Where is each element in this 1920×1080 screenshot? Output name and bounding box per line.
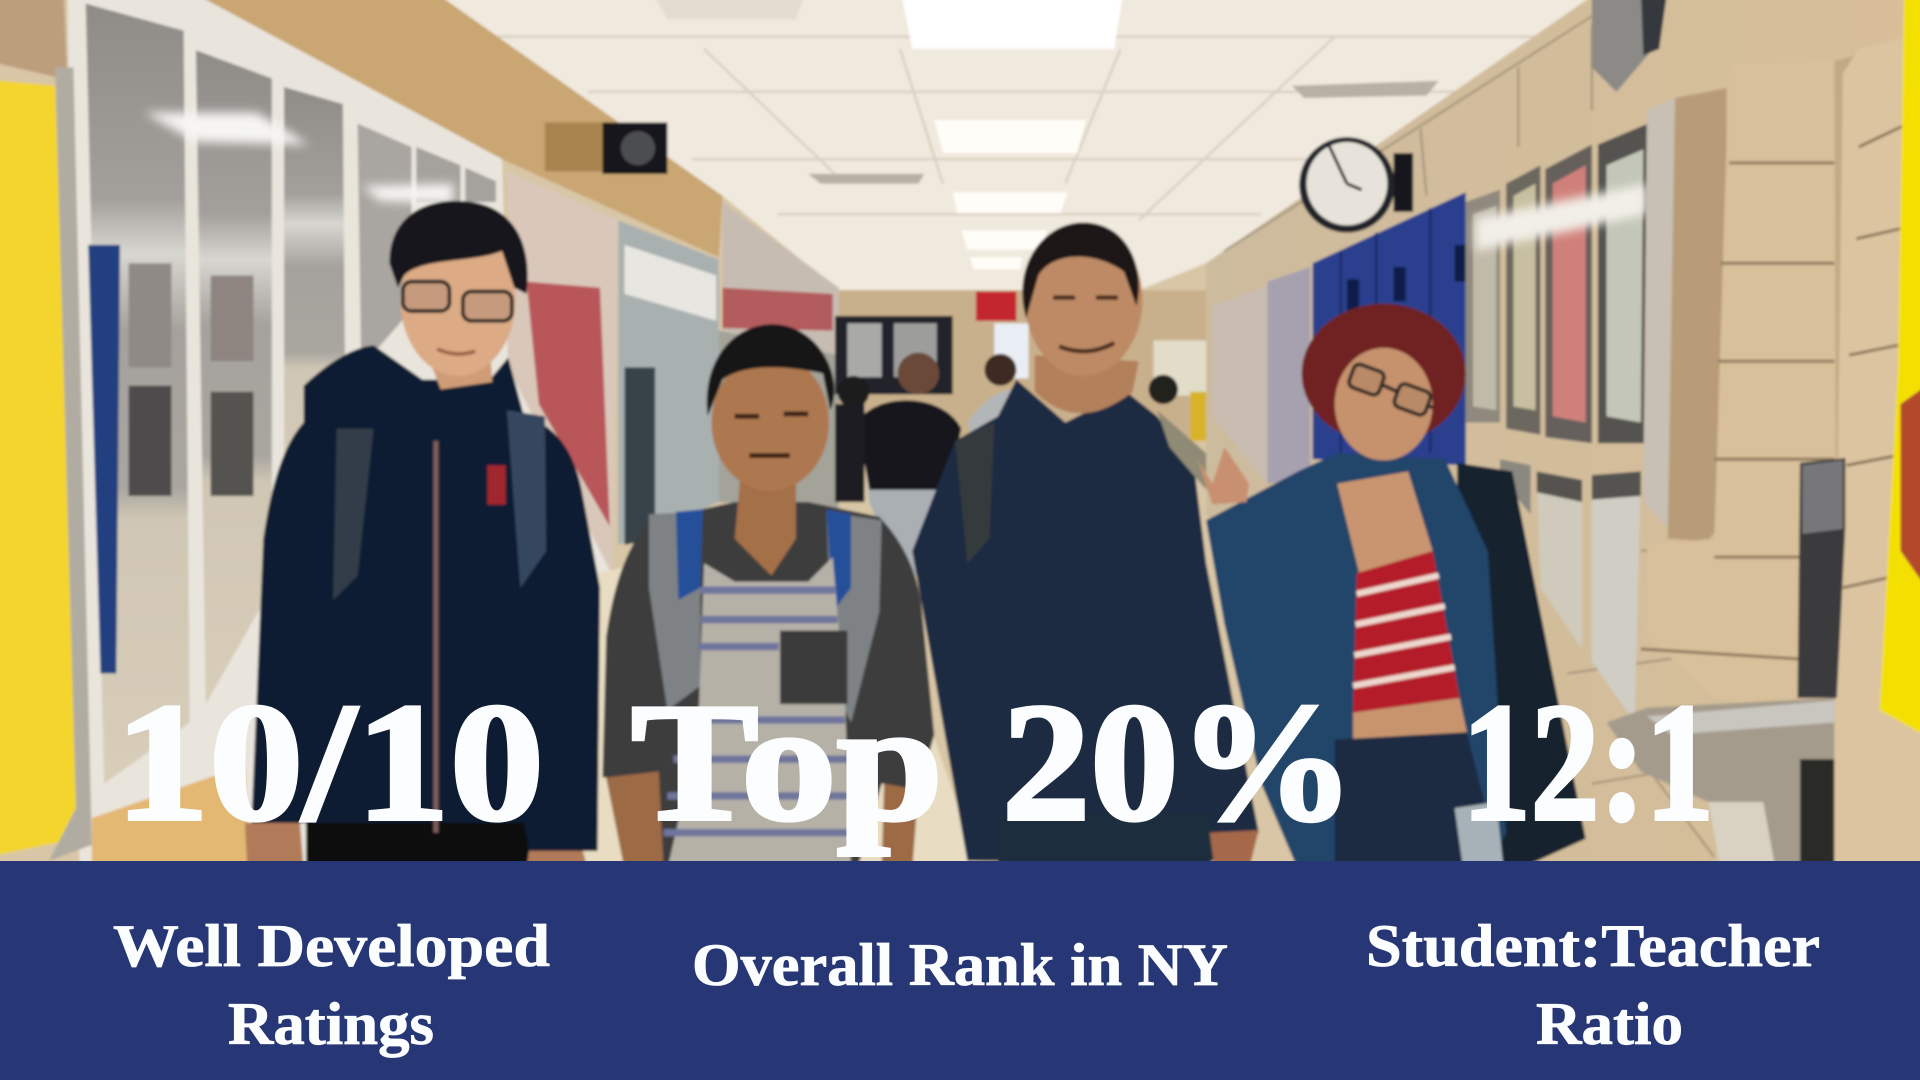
student 3: navy hoodie xyxy=(912,222,1259,869)
yellow bulletin board, left xyxy=(0,0,92,861)
headline statistics xyxy=(115,668,1714,856)
stat: 10/10: 10/10 xyxy=(115,668,544,856)
wall speaker xyxy=(545,122,667,174)
stat: Top: Top xyxy=(631,668,943,856)
caption: student teacher ratio: Ratio xyxy=(1536,991,1683,1057)
caption: well developed ratings xyxy=(113,913,550,1057)
student 4: denim jacket and red striped top xyxy=(1198,304,1586,869)
far end of the corridor xyxy=(576,290,1210,869)
caption: student teacher ratio: Student:Teacher xyxy=(1366,913,1820,979)
student 1: blue zip hoodie and glasses xyxy=(245,201,600,869)
ceiling with lights xyxy=(429,0,1604,290)
caption: overall rank in NY: Overall Rank in NY xyxy=(692,932,1228,998)
right wall with lockers, clock and artwork xyxy=(1206,0,1920,869)
student 2: striped shirt and grey cardigan xyxy=(602,324,934,869)
caption: well developed ratings: Ratings xyxy=(228,991,434,1057)
caption: well developed ratings: Well Developed xyxy=(113,913,550,979)
stat: 20%: 20% xyxy=(1002,668,1355,856)
navy caption band xyxy=(0,861,1920,1080)
wall clock xyxy=(1299,137,1413,233)
left wall with windows xyxy=(67,0,839,869)
caption: student teacher ratio xyxy=(1366,913,1820,1057)
stat: 12:1: 12:1 xyxy=(1462,668,1714,856)
tiled columns and drinking fountain xyxy=(1592,0,1920,869)
